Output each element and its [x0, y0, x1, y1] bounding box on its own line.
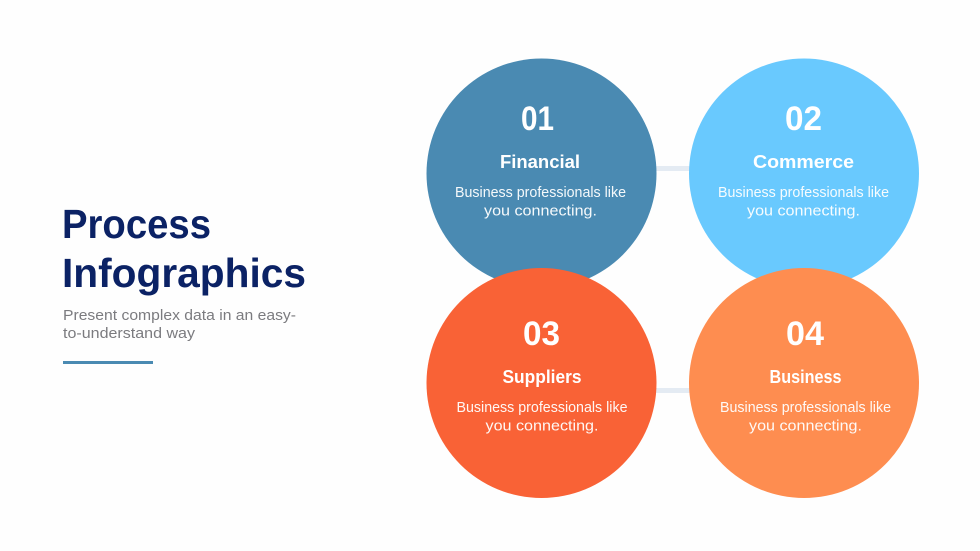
- accent underline: [63, 361, 153, 364]
- subtitle: [63, 307, 296, 342]
- subtitle: Present complex data in an easy-: [63, 307, 296, 324]
- title: Process: [62, 201, 211, 247]
- panel: 03 Suppliers: Business professionals like: [456, 399, 628, 416]
- title: Infographics: [62, 250, 306, 296]
- title: [62, 201, 306, 296]
- panel: 02 Commerce: Commerce: [753, 152, 854, 172]
- panel: 02 Commerce: [689, 58, 919, 288]
- panel: 04 Business: 04: [786, 315, 824, 353]
- panel: 04 Business: Business: [770, 367, 842, 387]
- panel: 03 Suppliers: 03: [523, 315, 560, 353]
- panel: 02 Commerce: 02: [785, 100, 822, 138]
- panel: 03 Suppliers: you connecting.: [486, 418, 598, 434]
- panel: 01 Financial: you connecting.: [484, 202, 597, 220]
- panel: 01 Financial: Business professionals like: [455, 184, 626, 201]
- panel: 02 Commerce: Business professionals like: [718, 184, 889, 201]
- panel: 01 Financial: 01: [521, 100, 554, 138]
- subtitle: to-understand way: [63, 325, 196, 342]
- panel: 04 Business: Business professionals like: [720, 399, 891, 416]
- panel: 03 Suppliers: [426, 268, 656, 498]
- panel: 02 Commerce: you connecting.: [747, 202, 860, 220]
- panel: 01 Financial: Financial: [500, 152, 580, 172]
- connector: top circles: [650, 166, 695, 171]
- panel: 01 Financial: [426, 58, 656, 288]
- connector: bottom circles: [650, 388, 695, 393]
- panel: 04 Business: you connecting.: [749, 418, 862, 434]
- panel: 03 Suppliers: Suppliers: [502, 367, 582, 387]
- panel: 04 Business: [689, 268, 919, 498]
